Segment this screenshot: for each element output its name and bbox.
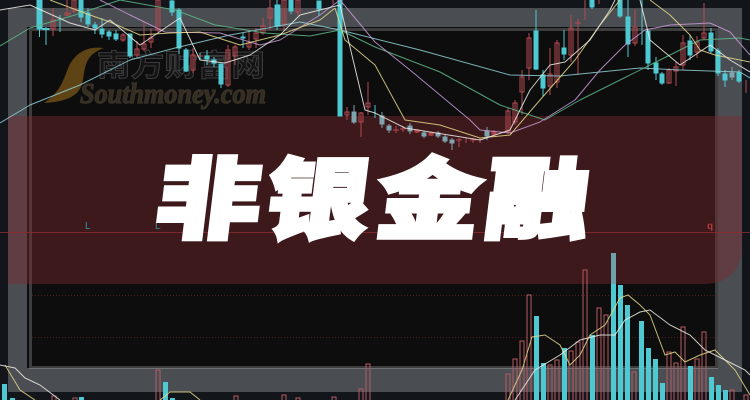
moving average lines bbox=[0, 0, 750, 140]
watermark logo bbox=[44, 48, 266, 110]
thin inner frame line bbox=[30, 30, 716, 368]
chart markers: L bbox=[85, 221, 91, 232]
watermark domain: Southmoney.com bbox=[80, 79, 266, 110]
title: 金 bbox=[371, 151, 487, 250]
icon: gold swoosh bbox=[44, 48, 104, 103]
title: 银 bbox=[260, 151, 376, 250]
title: 融 bbox=[480, 151, 596, 250]
dark red title band bbox=[8, 116, 742, 284]
chart markers bbox=[85, 221, 713, 232]
watermark Chinese name: 南方财富网 bbox=[97, 50, 265, 83]
dark inner panel bbox=[27, 27, 718, 368]
volume bars bbox=[2, 253, 748, 400]
tallest volume bar bbox=[611, 253, 616, 284]
volume average lines bbox=[0, 295, 750, 400]
chart markers: q bbox=[707, 221, 713, 232]
chart grid lines bbox=[0, 232, 750, 338]
chart markers: L bbox=[155, 221, 161, 232]
title: 非 bbox=[151, 151, 267, 250]
candlestick chart bbox=[37, 0, 746, 150]
